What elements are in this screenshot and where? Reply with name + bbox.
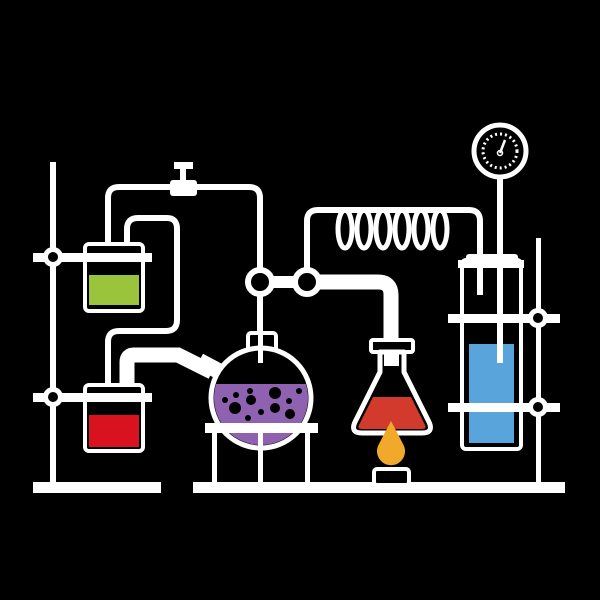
right base <box>193 482 565 493</box>
gauge <box>474 125 526 177</box>
valve <box>170 162 197 196</box>
burner <box>374 469 409 485</box>
left stand <box>33 162 161 493</box>
cylinder <box>458 254 524 449</box>
rings <box>248 270 319 294</box>
illustration: chemistry lab apparatus <box>33 122 565 493</box>
right clamps <box>448 308 560 417</box>
flame <box>377 421 405 465</box>
green beaker <box>82 244 152 311</box>
right pole <box>536 238 541 484</box>
round flask <box>208 331 314 450</box>
coil <box>338 210 447 248</box>
thick tube from red beaker to flask <box>127 355 212 383</box>
thick tube to erlenmeyer <box>315 282 391 365</box>
tubes <box>108 179 500 383</box>
flask stand <box>205 423 318 485</box>
erlenmeyer flask <box>354 340 430 433</box>
red beaker <box>82 385 152 451</box>
